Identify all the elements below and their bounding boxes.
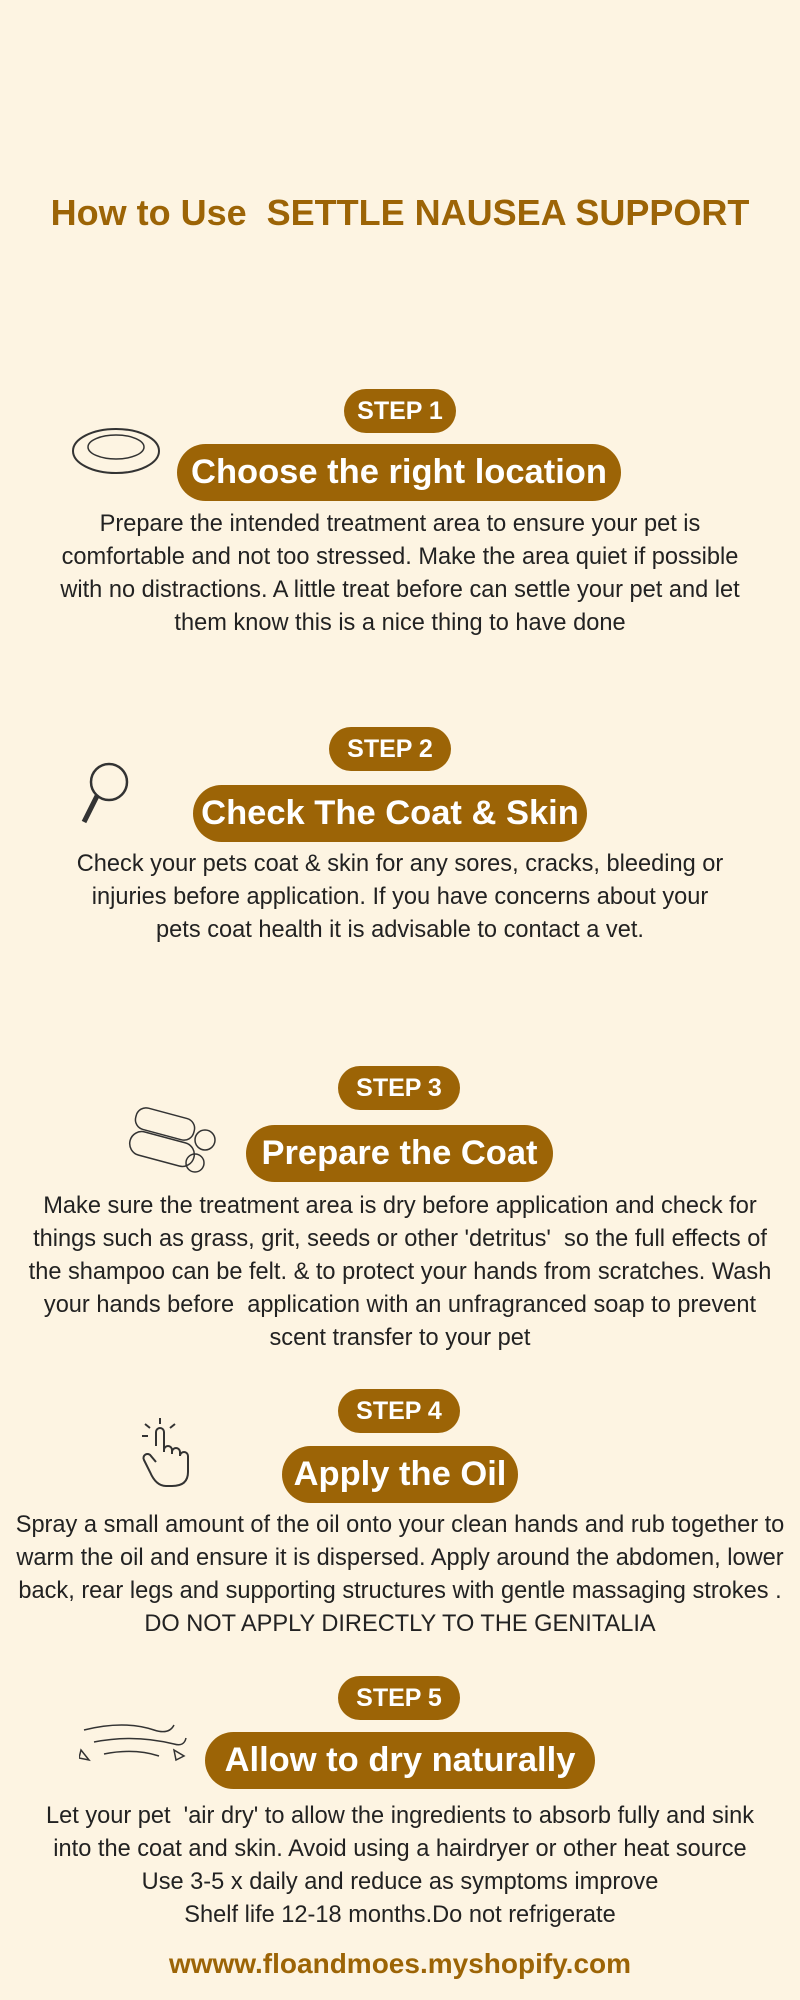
text 4: warm the oil and ensure it is dispersed. Apply around the abdomen, lower [16,1545,784,1571]
text 3: scent transfer to your pet [270,1325,530,1351]
text 3: the shampoo can be felt. & to protect your hands from scratches. Wash [29,1259,771,1285]
text 5: into the coat and skin. Avoid using a hairdryer or other heat source [53,1836,747,1862]
heading 4 [282,1446,518,1503]
step 5 label [338,1676,460,1720]
text 1 [60,511,740,636]
icon: towels [128,1107,216,1173]
text 3: things such as grass, grit, seeds or other 'detritus' so the full effects of [33,1226,767,1252]
text 5: Use 3-5 x daily and reduce as symptoms improve [142,1869,658,1895]
title: How to Use SETTLE NAUSEA SUPPORT [51,192,749,233]
text 2: injuries before application. If you have concerns about your [92,884,708,910]
step 4 label [338,1389,460,1433]
icon: magnifier [82,762,128,824]
heading 4: Apply the Oil [294,1455,506,1493]
text 4: DO NOT APPLY DIRECTLY TO THE GENITALIA [144,1611,656,1637]
text 1: comfortable and not too stressed. Make the area quiet if possible [62,544,738,570]
step 4 label: STEP 4 [356,1397,442,1425]
text 2: Check your pets coat & skin for any sores, cracks, bleeding or [77,851,723,877]
heading 5 [205,1732,595,1789]
text 4 [16,1512,784,1637]
text 4: back, rear legs and supporting structures with gentle massaging strokes . [18,1578,782,1604]
icon: pet bed [72,428,160,474]
step 2 label: STEP 2 [347,735,433,763]
text 1: Prepare the intended treatment area to ensure your pet is [100,511,700,537]
heading 1: Choose the right location [191,453,607,491]
heading 2: Check The Coat & Skin [201,794,579,832]
heading 2 [193,785,587,842]
text 5: Shelf life 12-18 months.Do not refrigerate [184,1902,616,1928]
text 2: pets coat health it is advisable to contact a vet. [156,917,644,943]
text 5 [46,1803,754,1928]
text 2 [77,851,723,943]
icon: wind [79,1724,187,1762]
step 2 label [329,727,451,771]
step 3 label [338,1066,460,1110]
text 3: Make sure the treatment area is dry before application and check for [43,1193,757,1219]
text 1: them know this is a nice thing to have done [174,610,626,636]
heading 1 [177,444,621,501]
text 3: your hands before application with an unfragranced soap to prevent [44,1292,756,1318]
icon: tapping hand [142,1418,189,1487]
step 1 label [344,389,456,433]
step 5 label: STEP 5 [356,1684,442,1712]
step 3 label: STEP 3 [356,1074,442,1102]
heading 5: Allow to dry naturally [225,1741,575,1779]
heading 3 [246,1125,553,1182]
website url: wwww.floandmoes.myshopify.com [169,1948,631,1979]
text 1: with no distractions. A little treat before can settle your pet and let [60,577,740,603]
text 4: Spray a small amount of the oil onto your clean hands and rub together to [16,1512,784,1538]
text 3 [29,1193,771,1351]
heading 3: Prepare the Coat [261,1134,538,1172]
step 1 label: STEP 1 [357,397,443,425]
text 5: Let your pet 'air dry' to allow the ingredients to absorb fully and sink [46,1803,754,1829]
